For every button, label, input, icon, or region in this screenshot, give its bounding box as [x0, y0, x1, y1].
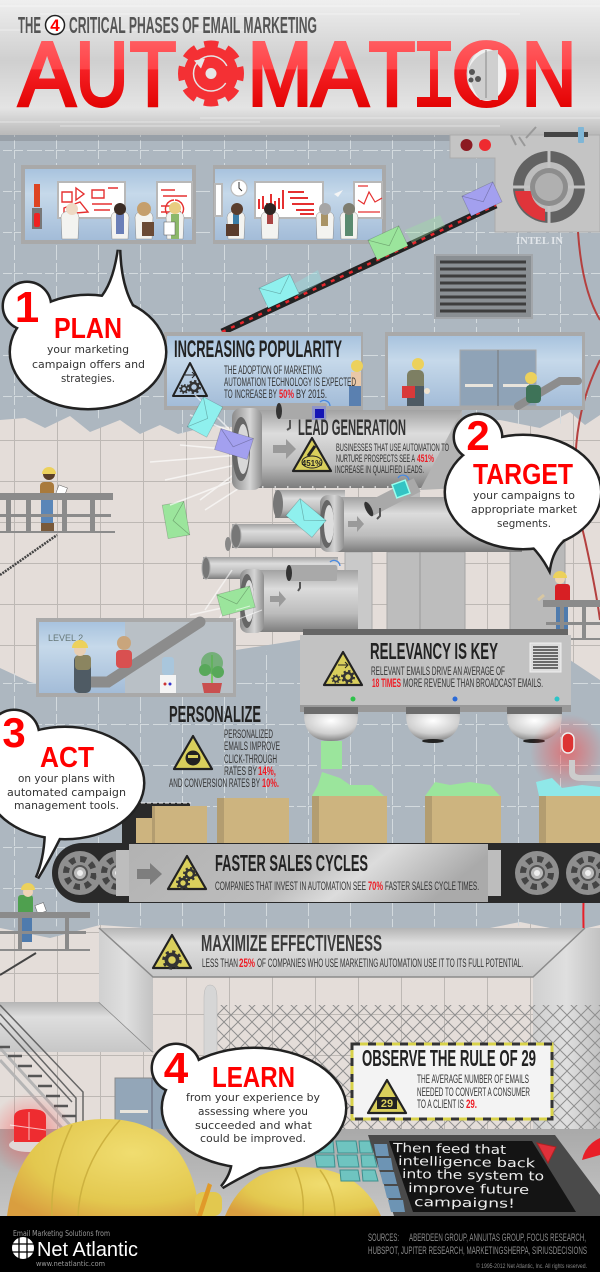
chain-link fence: [217, 1005, 600, 1130]
screen text: campaigns!: [414, 1194, 515, 1211]
panel: faster sales cycles: FASTER SALES CYCLES: [215, 850, 368, 876]
bubble: 1 plan: strategies.: [61, 372, 115, 385]
bubble: 2 target: appropriate market: [471, 503, 578, 516]
title AUTOMATION: T: [130, 25, 176, 125]
title AUTOMATION: O: [452, 25, 521, 125]
indicator lights: [460, 139, 491, 151]
icon: gear as letter O: [182, 44, 240, 103]
window left: [21, 165, 196, 244]
sign: observe the rule of 29: 29.: [466, 1097, 477, 1111]
screen text: improve future: [408, 1180, 530, 1197]
heading: INCREASING POPULARITY: [174, 336, 342, 363]
title AUTOMATION: A: [312, 25, 368, 125]
green envelope falling: [321, 741, 342, 769]
worker with folder: [402, 358, 430, 406]
bubble: 3 act: on your plans with: [18, 772, 115, 785]
icon: machine seen through the letter O: [468, 49, 506, 101]
pipe: target: [320, 475, 522, 552]
burst of streaks: [150, 395, 244, 510]
plant: [199, 652, 224, 693]
body text: [224, 363, 356, 401]
dial: [513, 151, 585, 223]
worker on scaffold left: [0, 467, 115, 575]
footer: [0, 1216, 600, 1272]
body text: 451%: [417, 453, 434, 465]
scaffold: [538, 600, 600, 640]
woman on escalator: [116, 636, 132, 668]
icon: warning 29: 29: [381, 1098, 393, 1110]
icon: warning gears: [168, 856, 206, 889]
pipe: personalize: [190, 560, 358, 635]
title AUTOMATION: O: [192, 47, 230, 103]
bubble: 3 act: 3: [2, 709, 26, 756]
bubble: 4 learn: LEARN: [212, 1062, 295, 1094]
bubble: 1 plan: 1: [15, 283, 39, 332]
fire extinguisher: [32, 184, 42, 229]
icon: warning gears: [324, 652, 362, 685]
slider: [544, 127, 588, 143]
body text: EMAILS IMPROVE: [224, 741, 280, 753]
body text: AUTOMATION TECHNOLOGY IS EXPECTED: [224, 375, 356, 389]
worker on escalator: [518, 372, 578, 406]
bubble: 4 learn: assessing where you: [198, 1105, 308, 1118]
duct: maximize effectiveness: MAXIMIZE EFFECTIVENESS: [201, 930, 382, 956]
red cable: [575, 232, 600, 1040]
barcode: [530, 643, 561, 672]
envelope: purple entering pipe: [215, 429, 253, 459]
body text: TO INCREASE BY: [224, 387, 277, 401]
icon: number 4 circle: [46, 16, 64, 35]
bubble: 3 act: [0, 709, 143, 878]
panel: relevancy is key: 18 TIMES: [372, 676, 401, 690]
bubble: 2 target: your campaigns to: [473, 489, 575, 502]
console floor: [0, 1129, 600, 1216]
bubble: 3 act: management tools.: [14, 799, 119, 812]
bubble: 2 target: segments.: [497, 517, 551, 530]
sources: SOURCES:: [368, 1232, 399, 1244]
heading: LEAD GENERATION: [298, 415, 406, 440]
body text: THE ADOPTION OF MARKETING: [224, 363, 322, 377]
body text: NURTURE PROSPECTS SEE A: [336, 453, 415, 465]
body text: INCREASE IN QUALIFIED LEADS.: [335, 464, 424, 476]
scaffold: [0, 912, 90, 951]
pipe: lead generation: [150, 395, 462, 510]
alarm light: [530, 714, 600, 790]
label: intel in: INTEL IN: [516, 236, 564, 247]
scientists: [61, 202, 184, 239]
envelope: cyan in pipe: [286, 499, 326, 537]
arrow: [137, 863, 162, 885]
structural columns under pipes: [345, 480, 565, 642]
pencil: [197, 1183, 212, 1216]
windows: planning team: [21, 165, 386, 244]
escalator: [88, 622, 200, 682]
sources: [368, 1232, 587, 1257]
door: [115, 1078, 172, 1133]
body text: AND CONVERSION RATES BY: [169, 778, 260, 790]
scaffold: [0, 493, 115, 533]
title AUTOMATION: T: [369, 25, 415, 125]
bubble: 1 plan: PLAN: [54, 313, 122, 345]
title AUTOMATION: N: [522, 25, 576, 125]
body text: 14%,: [258, 766, 276, 778]
window: level 2: [36, 618, 236, 697]
panel: relevancy is key: [300, 629, 571, 712]
keypad: [313, 1141, 378, 1181]
panel: faster sales cycles: [129, 844, 488, 902]
vertical pipe: [204, 985, 217, 1060]
red triangle: [537, 1143, 556, 1163]
subtitle: THE: [18, 12, 41, 38]
bubble: 2 target: [446, 412, 600, 568]
subtitle: [18, 12, 317, 38]
envelope: green: [368, 226, 408, 260]
duct: maximize effectiveness: [0, 928, 600, 1132]
red hose end: [582, 1138, 600, 1160]
envelope: green in pipe: [217, 586, 255, 616]
icon: warning thumbs up: [293, 438, 331, 471]
hard hats: [7, 1119, 381, 1216]
body text: BY 2015.: [296, 387, 327, 401]
wheel: [58, 851, 102, 895]
heading: personalize: [169, 701, 280, 790]
envelope: cyan from roof: [187, 397, 223, 437]
header metal band: [0, 0, 600, 141]
duct: maximize effectiveness: LESS THAN: [202, 956, 238, 970]
arrow: [270, 591, 286, 607]
elevator doors: [460, 350, 536, 406]
clock: [231, 180, 247, 196]
light trails: [405, 215, 445, 243]
body text: 10%.: [262, 778, 279, 790]
sensor: [362, 477, 421, 517]
bubble: 4 learn: [153, 1044, 345, 1187]
body text: BUSINESSES THAT USE AUTOMATION TO: [336, 442, 449, 454]
pipes: small background pipes: [202, 490, 345, 579]
diagonal email conveyor: [222, 182, 502, 332]
body text: 50%: [279, 387, 294, 401]
bubble: 4 learn: from your experience by: [186, 1091, 320, 1104]
sensor: [276, 400, 330, 430]
worker behind text: [349, 360, 363, 406]
worker on scaffold right: [538, 571, 600, 640]
boxes on conveyor: [122, 741, 600, 843]
envelope: green flying: [162, 501, 190, 539]
window right: [213, 165, 386, 244]
icon: warning mask: [174, 736, 212, 769]
screen text: [392, 1140, 544, 1211]
icon: warning gears: [173, 363, 207, 396]
sign: observe the rule of 29: TO A CLIENT IS: [417, 1097, 464, 1111]
bubble: 3 act: ACT: [40, 742, 94, 774]
body text: [169, 729, 280, 790]
footer: Email Marketing Solutions from: [13, 1229, 110, 1238]
sensor: [286, 560, 340, 591]
email piles: [312, 772, 384, 796]
panel: faster sales cycles: 70%: [368, 879, 383, 893]
title AUTOMATION: U: [76, 25, 128, 125]
panel: relevancy is key: RELEVANCY IS KEY: [370, 638, 498, 664]
bubble: 4 learn: succeeded and what: [195, 1119, 313, 1132]
toggle switches: [511, 127, 536, 146]
screen text: intelligence back: [398, 1153, 536, 1170]
email dispensers: [304, 707, 562, 743]
panel: faster sales cycles: FASTER SALES CYCLE TIMES.: [385, 879, 479, 893]
worker: [72, 640, 91, 693]
screen text: into the system to: [402, 1166, 544, 1183]
sign: observe the rule of 29: [352, 1044, 552, 1119]
envelope: cyan: [259, 274, 299, 308]
worker on scaffold lower left: [0, 883, 90, 975]
window: elevators and workers: [385, 332, 585, 410]
body text: CLICK-THROUGH: [224, 754, 277, 766]
bubble: 2 target: 2: [466, 412, 490, 459]
icon: warning thumbs up: 451%: [302, 459, 322, 468]
body text: [335, 442, 449, 476]
buttons: [374, 1144, 405, 1212]
whiteboards: [58, 182, 192, 218]
screen text: Then feed that: [392, 1140, 506, 1157]
stairs: [0, 1005, 83, 1128]
title AUTOMATION: [19, 25, 576, 125]
icon: warning gear: [153, 935, 191, 968]
bubble: 3 act: automated campaign: [7, 786, 126, 799]
bubble: 2 target: TARGET: [473, 459, 573, 491]
icon: warning 29: [368, 1080, 406, 1113]
conveyor belt: [52, 843, 600, 903]
title AUTOMATION: I: [426, 25, 442, 125]
duct: maximize effectiveness: 25%: [239, 956, 255, 970]
bubble: 4 learn: 4: [164, 1044, 189, 1093]
panel: faster sales cycles: COMPANIES THAT INVEST IN AUTOMATION SEE: [215, 879, 366, 893]
level label: LEVEL 2: [48, 633, 83, 643]
LEDs: [350, 696, 560, 702]
vent: [435, 255, 532, 318]
console screen: [368, 1135, 600, 1216]
window: increasing popularity: [164, 332, 363, 410]
icon: globe: [12, 1237, 34, 1259]
bubble: 4 learn: could be improved.: [200, 1132, 306, 1145]
red beacon: [0, 1093, 72, 1177]
arrow: [273, 439, 296, 459]
bubble: 1 plan: campaign offers and: [32, 358, 145, 371]
bubble: 1 plan: [4, 250, 165, 408]
water cooler: [160, 657, 176, 693]
envelope: purple: [462, 182, 502, 216]
bubble: 1 plan: your marketing: [47, 343, 129, 356]
title AUTOMATION: A: [19, 25, 75, 125]
title AUTOMATION: M: [248, 25, 312, 125]
body text: RATES BY: [224, 766, 257, 778]
body text: PERSONALIZED: [224, 729, 273, 741]
logo: Net Atlantic: [37, 1239, 138, 1261]
icon: number 4 circle: 4: [50, 16, 60, 35]
arrow: [348, 516, 364, 532]
control panel: [450, 127, 600, 247]
subtitle: CRITICAL PHASES OF EMAIL MARKETING: [69, 12, 317, 38]
footer: www.netatlantic.com: [36, 1260, 105, 1268]
heading: personalize: PERSONALIZE: [169, 701, 261, 727]
